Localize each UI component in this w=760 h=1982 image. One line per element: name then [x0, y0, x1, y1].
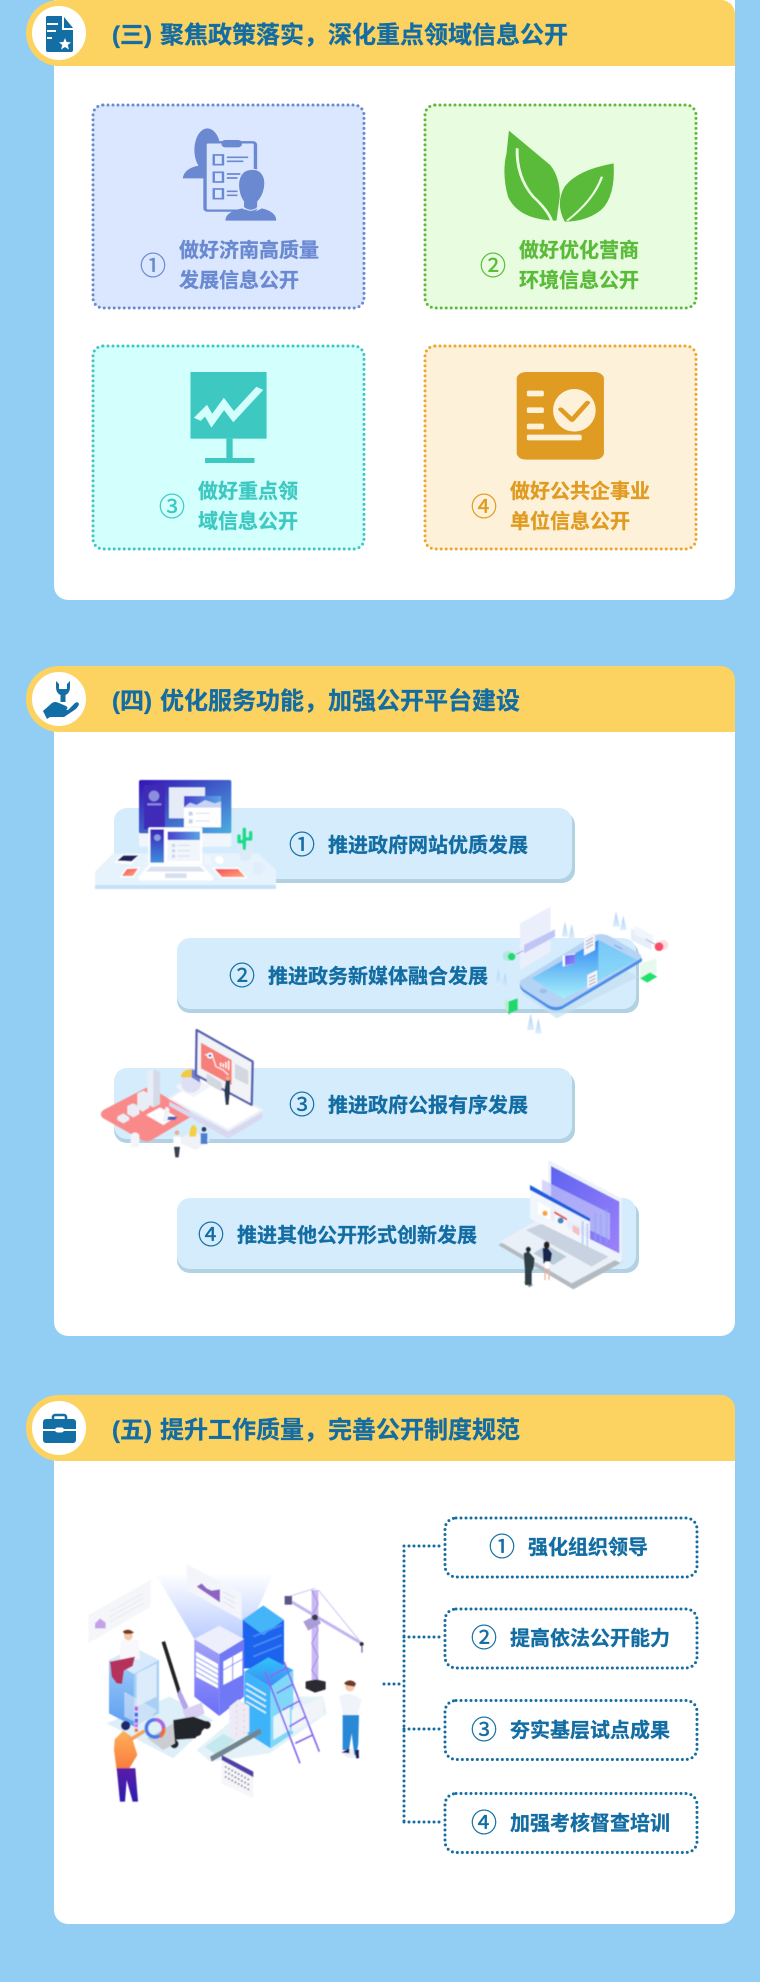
icon: hand holding wrench: [43, 681, 79, 719]
item box: strengthen leadership: [445, 1518, 697, 1577]
illustration: isometric smart city construction: [88, 1564, 364, 1802]
panel: section four platform: [26, 666, 735, 1336]
icon: green leaves: [504, 131, 614, 222]
illustration: laptop with people: [498, 1160, 623, 1289]
number three: ③: [159, 487, 185, 524]
label: new media: 推进政务新媒体融合发展: [268, 965, 488, 988]
label: grassroots: 夯实基层试点成果: [510, 1718, 670, 1742]
heading: section three: (三): [112, 22, 152, 49]
label: gazette: 推进政府公报有序发展: [328, 1093, 528, 1117]
number two: ②: [229, 956, 255, 993]
icon: people and checklist: [183, 128, 276, 221]
item: other open formats: [177, 1160, 639, 1289]
label: card three: 域信息公开: [198, 509, 298, 533]
item box: assessment and training: [445, 1794, 697, 1852]
header: section five: [26, 1395, 735, 1461]
label: card one: 做好济南高质量: [179, 238, 319, 262]
item box: legal openness: [445, 1609, 697, 1668]
number one: ①: [489, 1527, 515, 1564]
panel: section three policy: [26, 0, 735, 600]
heading: section four: 优化服务功能，加强公开平台建设: [160, 687, 520, 715]
icon: document with star: [46, 16, 73, 52]
label: website: 推进政府网站优质发展: [328, 833, 528, 857]
label: assessment: 加强考核督查培训: [510, 1811, 670, 1835]
number four: ④: [471, 487, 497, 524]
item: official gazette: [101, 1030, 575, 1157]
card: public enterprises: [425, 346, 696, 549]
icon: checklist document: [517, 372, 604, 460]
illustration: desktop and laptop: [95, 780, 276, 889]
label: legal openness: 提高依法公开能力: [510, 1626, 670, 1650]
header: section three: [26, 0, 735, 66]
label: card one: 发展信息公开: [179, 268, 299, 292]
item: website development: [95, 780, 575, 889]
heading: section five: 提升工作质量，完善公开制度规范: [160, 1417, 520, 1444]
panel: section five system: [26, 1395, 735, 1924]
number one: ①: [289, 825, 315, 862]
label: other formats: 推进其他公开形式创新发展: [237, 1224, 477, 1247]
card: business environment: [425, 105, 696, 308]
label: card four: 单位信息公开: [510, 509, 630, 533]
item box: grassroots pilots: [445, 1700, 697, 1760]
heading: section five: (五): [112, 1417, 152, 1444]
illustration: isometric data screen: [101, 1030, 262, 1157]
number four: ④: [198, 1215, 224, 1252]
number three: ③: [471, 1710, 497, 1747]
heading: section four: (四): [112, 688, 152, 715]
icon: chart board: [190, 372, 267, 463]
label: card four: 做好公共企事业: [510, 479, 650, 503]
icon: briefcase: [43, 1415, 76, 1443]
label: card three: 做好重点领: [198, 480, 298, 503]
label: card two: 环境信息公开: [519, 268, 639, 292]
number two: ②: [471, 1618, 497, 1655]
number two: ②: [480, 246, 506, 283]
number four: ④: [471, 1803, 497, 1840]
heading: section three: 聚焦政策落实，深化重点领域信息公开: [160, 22, 568, 49]
number one: ①: [140, 246, 166, 283]
number three: ③: [289, 1085, 315, 1122]
illustration: smartphone: [495, 907, 668, 1033]
label: card two: 做好优化营商: [519, 239, 639, 262]
connector: dotted bracket lines: [384, 1546, 441, 1822]
card: key areas: [93, 346, 364, 549]
card: Jinan development: [93, 105, 364, 308]
label: leadership: 强化组织领导: [528, 1536, 648, 1559]
header: section four: [26, 666, 735, 732]
item: new media integration: [177, 907, 668, 1033]
